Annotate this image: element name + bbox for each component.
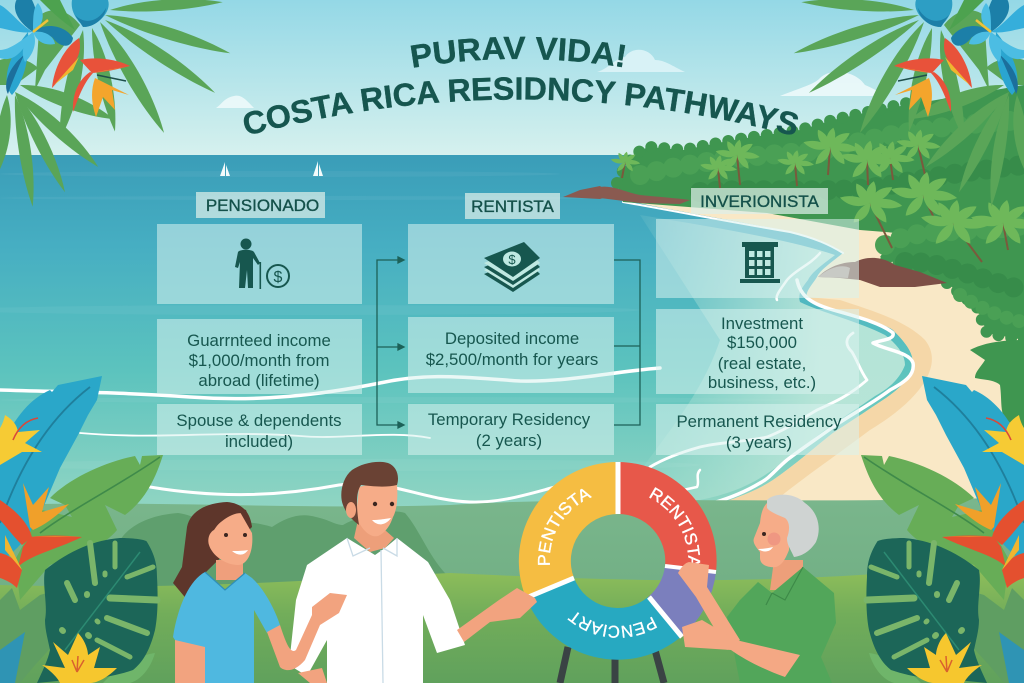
donut chart wheel bbox=[518, 462, 717, 660]
text: guaranteed income: Guarrnteed income bbox=[187, 331, 331, 350]
donut chart wheel: PENTISTA bbox=[538, 488, 592, 565]
text: investment: Investment bbox=[721, 314, 803, 333]
panel: rentista bbox=[408, 193, 614, 455]
clouds bbox=[216, 50, 885, 108]
text: permanent residency: Permanent Residency bbox=[676, 412, 842, 431]
surf lines bbox=[0, 368, 660, 502]
palm trees bbox=[610, 127, 1024, 262]
arrows: left connector bbox=[377, 257, 404, 428]
person: man in white shirt bbox=[289, 462, 537, 683]
foam bbox=[623, 202, 913, 503]
title: COSTA RICA RESIDNCY PATHWAYS bbox=[244, 77, 798, 135]
stand legs bbox=[560, 647, 664, 683]
foliage: bottom left bbox=[0, 376, 163, 683]
foliage scallops bbox=[617, 100, 920, 183]
foliage: bottom right bbox=[861, 376, 1024, 683]
text: temporary residency: (2 years) bbox=[476, 431, 542, 450]
person: older man in green shirt bbox=[678, 495, 836, 683]
heading: pensionado: PENSIONADO bbox=[206, 196, 319, 215]
title: PURAV VIDA! bbox=[410, 36, 626, 68]
sea streaks bbox=[0, 171, 800, 471]
jungle bbox=[617, 85, 1024, 340]
segment: rentista bbox=[618, 462, 717, 572]
text: deposited income: Deposited income bbox=[445, 329, 579, 348]
icon: retiree with cane and coin bbox=[235, 238, 289, 289]
icon: stack of money: $ bbox=[508, 252, 516, 267]
segment: purple bbox=[648, 566, 716, 636]
hills bbox=[0, 497, 1024, 683]
donut chart wheel: RENTISTA bbox=[649, 487, 700, 564]
text: investment: $150,000 bbox=[727, 333, 797, 352]
donut chart wheel: PENCIART bbox=[568, 612, 658, 638]
heading: inverionista: INVERIONISTA bbox=[700, 192, 820, 211]
heading: inverionista bbox=[691, 188, 828, 214]
icon: stack of money bbox=[484, 242, 540, 292]
segment: pentista bbox=[519, 462, 618, 598]
title bbox=[244, 36, 798, 135]
text: investment: (real estate, bbox=[718, 354, 806, 373]
foliage: top right bbox=[792, 0, 1024, 207]
icon: retiree with cane and coin: $ bbox=[274, 269, 283, 286]
text: guaranteed income: $1,000/month from bbox=[189, 351, 329, 370]
text: deposited income: $2,500/month for years bbox=[426, 350, 598, 369]
icon: building bbox=[740, 242, 780, 283]
sea bbox=[0, 155, 1024, 515]
text: spouse and dependents: included) bbox=[225, 432, 293, 451]
text: spouse and dependents: Spouse & dependents bbox=[176, 411, 342, 430]
beach bbox=[623, 200, 1024, 510]
heading: rentista bbox=[465, 193, 560, 219]
shallow water bbox=[620, 215, 905, 500]
text: guaranteed income: abroad (lifetime) bbox=[198, 371, 320, 390]
wet sand band bbox=[717, 297, 932, 505]
panel: inversionista bbox=[656, 188, 859, 455]
text: permanent residency: (3 years) bbox=[726, 433, 792, 452]
text: temporary residency: Temporary Residency bbox=[428, 410, 591, 429]
lower right vegetation bbox=[970, 340, 1024, 430]
grass bbox=[0, 558, 1024, 683]
heading: rentista: RENTISTA bbox=[471, 197, 555, 216]
rocks bbox=[563, 186, 947, 287]
heading: pensionado bbox=[196, 192, 325, 218]
person: woman in blue shirt bbox=[173, 502, 347, 683]
panel: pensionado bbox=[157, 192, 362, 455]
text: investment: business, etc.) bbox=[708, 373, 816, 392]
background: sky bbox=[0, 0, 1024, 156]
tree line bbox=[120, 511, 450, 600]
segment: penciart bbox=[526, 578, 682, 660]
connector: right bracket bbox=[614, 260, 640, 425]
foliage: top left bbox=[0, 0, 232, 207]
sailboats bbox=[220, 161, 323, 176]
